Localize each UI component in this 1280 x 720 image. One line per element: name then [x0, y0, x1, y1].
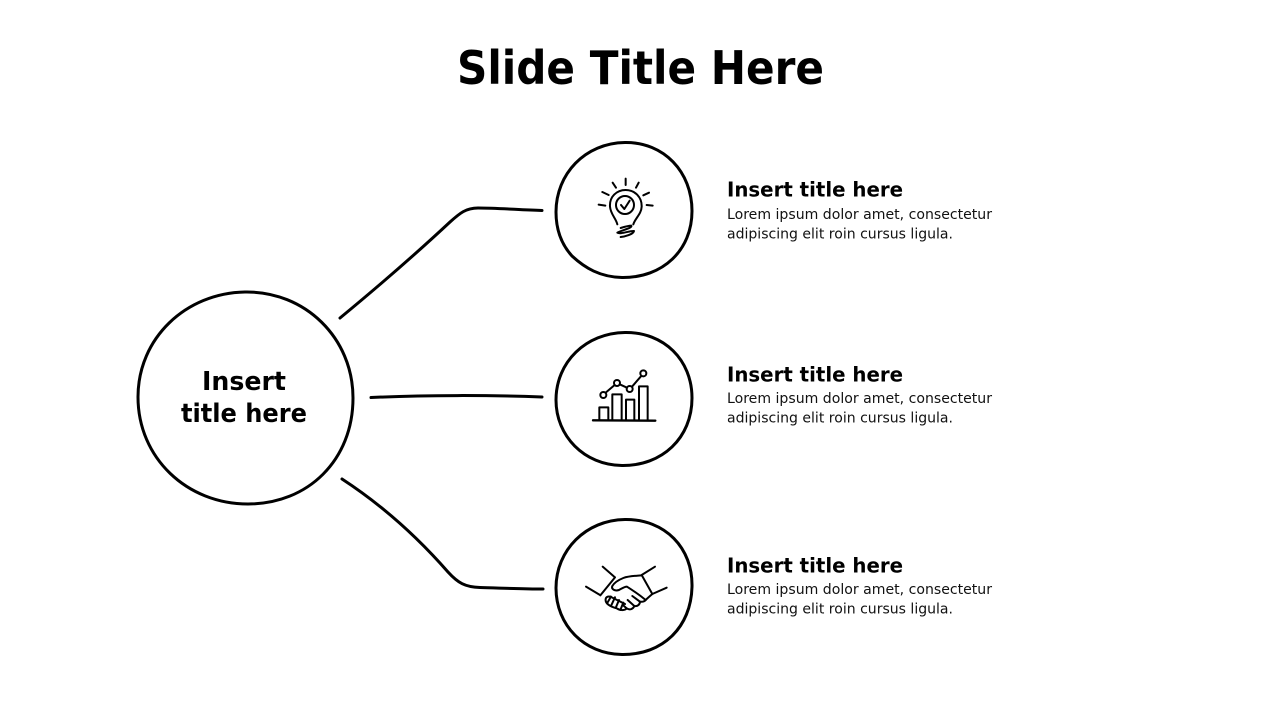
middle item circle	[556, 332, 692, 466]
icon: handshake	[586, 567, 667, 610]
title: Slide Title Here	[457, 41, 824, 95]
middle item text: Insert title here	[727, 362, 903, 386]
top item text	[727, 178, 992, 242]
bottom item circle	[556, 519, 692, 655]
central circle label: Insert	[202, 367, 286, 397]
panel: bottom item	[556, 519, 992, 655]
middle item text	[727, 362, 992, 426]
bottom item text: adipiscing elit roin cursus ligula.	[727, 602, 953, 618]
central circle label	[181, 367, 307, 429]
icon: bar chart with trend line	[593, 370, 655, 421]
panel: central circle	[138, 292, 353, 504]
top item text: Lorem ipsum dolor amet, consectetur	[727, 207, 992, 223]
bottom item text	[727, 554, 992, 618]
central circle outline	[138, 292, 353, 504]
bottom item text: Insert title here	[727, 554, 903, 578]
central circle label: title here	[181, 399, 307, 429]
middle item text: Lorem ipsum dolor amet, consectetur	[727, 391, 992, 407]
bottom item text: Lorem ipsum dolor amet, consectetur	[727, 582, 992, 598]
panel: middle item	[556, 332, 992, 466]
connector: centre to middle item	[371, 396, 542, 398]
panel: top item	[556, 142, 992, 278]
icon: light bulb with check	[599, 179, 653, 237]
top item circle	[556, 142, 692, 278]
top item text: adipiscing elit roin cursus ligula.	[727, 226, 953, 242]
connector: centre to top item	[340, 208, 542, 318]
connector: centre to bottom item	[342, 479, 543, 589]
middle item text: adipiscing elit roin cursus ligula.	[727, 410, 953, 426]
top item text: Insert title here	[727, 178, 903, 202]
